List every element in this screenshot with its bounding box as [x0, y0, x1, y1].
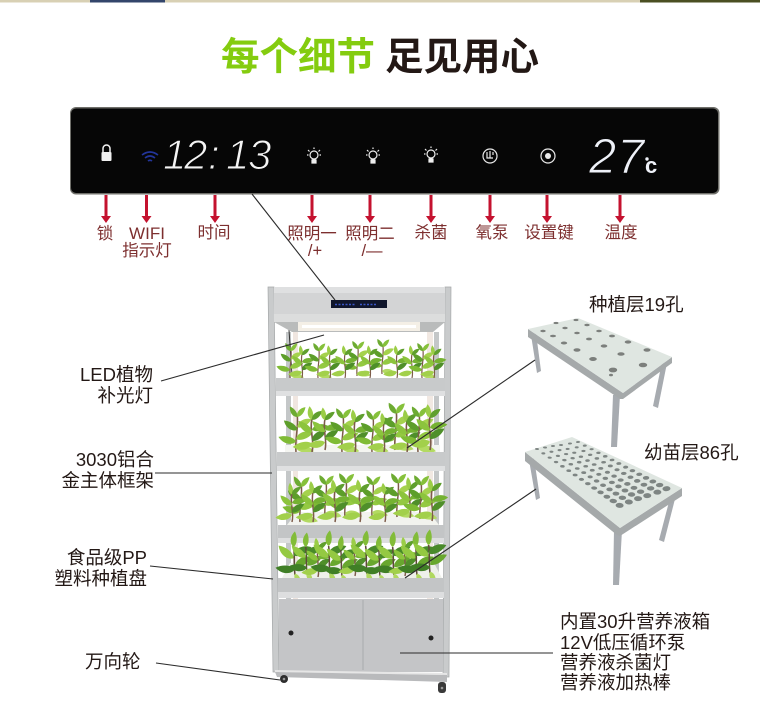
icon: sterilising light [424, 146, 438, 162]
control labels: 照明一 [287, 225, 337, 243]
clock reading: 12:13 [163, 131, 271, 178]
leader lines [150, 194, 553, 680]
control labels: 杀菌 [414, 223, 448, 242]
label: cabinet contents: 内置30升营养液箱 [560, 611, 710, 632]
label: food-grade tray: 食品级PP [67, 547, 147, 568]
caster left [280, 675, 288, 683]
planting holes [540, 319, 650, 376]
table top [525, 437, 682, 528]
temperature reading: c [645, 153, 657, 178]
panel: control display [70, 107, 720, 194]
control labels [97, 223, 638, 260]
icon: settings key [541, 149, 555, 163]
tier 4 plants [275, 529, 449, 587]
caster right [438, 682, 446, 693]
control labels: 温度 [604, 223, 638, 242]
label: aluminium frame: 金主体框架 [61, 470, 154, 491]
table skirt [528, 329, 672, 399]
icon: light one [307, 148, 321, 163]
table top [528, 318, 672, 393]
title: 每个细节 [221, 36, 375, 79]
control labels: 指示灯 [122, 241, 172, 260]
table legs [531, 333, 667, 447]
tier 2 tray [277, 452, 445, 471]
control labels: /+ [308, 242, 322, 260]
icon: lock [102, 145, 112, 161]
rack: growing frame [268, 287, 451, 693]
front right post [443, 287, 451, 677]
seedling holes [532, 436, 671, 508]
control labels: 设置键 [524, 223, 574, 242]
label: casters: 万向轮 [85, 651, 141, 672]
label: food-grade tray [54, 547, 147, 589]
label: planting tier: 种植层19孔 [589, 294, 684, 315]
label: food-grade tray: 塑料种植盘 [54, 568, 147, 589]
control labels: /— [361, 242, 383, 260]
callout arrows [101, 195, 625, 223]
header box [274, 287, 445, 322]
label: cabinet contents: 营养液杀菌灯 [560, 652, 671, 673]
top cropped photo band [0, 0, 760, 2]
label: cabinet contents: 营养液加热棒 [560, 672, 671, 693]
mini control display [331, 300, 387, 308]
label: aluminium frame: 3030铝合 [76, 449, 154, 470]
icon: light two [366, 148, 380, 163]
tier 2 plants [277, 401, 448, 454]
cabinet with sliding doors [275, 599, 447, 682]
LED grow light [274, 322, 445, 332]
control labels: 照明二 [345, 225, 395, 243]
control labels: 氧泵 [476, 223, 508, 242]
rear posts and pipes [286, 330, 439, 602]
label: cabinet contents: 12V低压循环泵 [560, 632, 685, 653]
tier 1 tray [276, 378, 445, 396]
control labels: WIFI [129, 224, 165, 243]
icon: wifi indicator [142, 152, 158, 161]
label: cabinet contents [560, 611, 710, 693]
front left post [268, 287, 279, 672]
label: seedling tier: 幼苗层86孔 [644, 442, 739, 463]
table skirt [525, 452, 682, 536]
label: LED plant light: 补光灯 [97, 385, 153, 406]
seedling tier table, 86 holes [525, 436, 682, 585]
control labels: 时间 [198, 223, 230, 242]
tier 1 plants [276, 338, 447, 380]
label: aluminium frame [61, 449, 154, 491]
tier 3 tray [278, 525, 444, 543]
label: LED plant light: LED植物 [80, 364, 153, 385]
title: 足见用心 [385, 36, 539, 79]
temperature reading: 27 [588, 130, 646, 184]
icon: oxygen pump [483, 149, 497, 163]
control labels: 锁 [97, 224, 113, 243]
planting tier table, 19 holes [528, 318, 672, 447]
label: LED plant light [80, 364, 153, 406]
table legs [529, 458, 675, 585]
tier 4 tray [278, 578, 444, 598]
tier 3 plants [275, 472, 449, 525]
